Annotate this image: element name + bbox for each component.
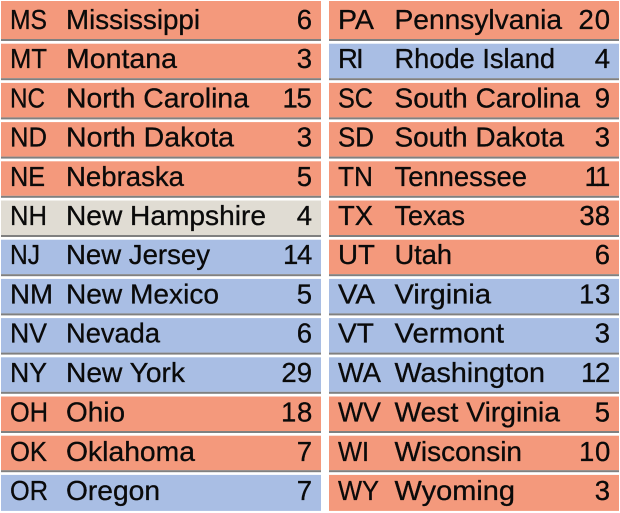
row: Washington: 12	[581, 357, 610, 388]
row: Nevada: 6	[297, 318, 312, 349]
row: North Carolina	[1, 82, 321, 119]
row: Vermont	[329, 318, 619, 355]
row: New Hampshire: 4	[297, 200, 312, 231]
row: Nevada: Nevada	[66, 318, 161, 349]
row: Rhode Island	[329, 43, 619, 80]
row: North Dakota: 3	[297, 122, 312, 153]
row: West Virginia: WV	[338, 396, 382, 427]
row: Vermont: VT	[338, 318, 374, 349]
row: Nebraska	[1, 161, 321, 198]
row: Vermont: 3	[595, 318, 610, 349]
row: New Mexico: 5	[297, 278, 312, 309]
row: Wyoming: Wyoming	[394, 475, 515, 506]
row: North Dakota: North Dakota	[66, 122, 235, 153]
row: Mississippi: 6	[297, 4, 312, 35]
row: Tennessee: TN	[338, 161, 373, 192]
row: South Dakota: South Dakota	[394, 122, 565, 153]
row: New Hampshire	[1, 200, 321, 237]
row: Washington: WA	[338, 357, 382, 388]
row: Virginia: VA	[338, 278, 376, 309]
row: Texas: 38	[579, 200, 610, 231]
row: New Jersey: New Jersey	[66, 239, 210, 270]
row: Wisconsin: WI	[338, 436, 369, 467]
row: Oklahoma	[1, 436, 321, 472]
row: Wyoming: WY	[338, 475, 379, 506]
row: Utah	[329, 239, 619, 276]
row: Oregon: Oregon	[66, 475, 160, 506]
row: Ohio: Ohio	[66, 396, 125, 427]
row: South Dakota: SD	[338, 122, 374, 153]
row: North Dakota: ND	[10, 122, 47, 153]
row: West Virginia: 5	[595, 396, 610, 427]
row: Montana: MT	[10, 43, 47, 74]
row: South Carolina: South Carolina	[394, 82, 581, 113]
row: Washington: Washington	[394, 357, 545, 388]
row: New Hampshire: New Hampshire	[66, 200, 266, 231]
row: South Dakota: 3	[595, 122, 610, 153]
row: New Mexico: New Mexico	[66, 278, 219, 309]
row: Rhode Island: 4	[595, 43, 610, 74]
row: North Carolina: NC	[10, 82, 45, 113]
row: Rhode Island: RI	[338, 43, 364, 74]
row: North Dakota	[1, 122, 321, 159]
row: Washington	[329, 357, 619, 394]
row: Texas: TX	[338, 200, 373, 231]
row: Nevada: NV	[10, 318, 48, 349]
row: Ohio	[1, 396, 321, 433]
row: South Carolina: SC	[338, 82, 373, 113]
row: Mississippi: MS	[10, 4, 47, 35]
row: Oregon: OR	[10, 475, 48, 506]
row: Pennsylvania: PA	[338, 4, 375, 35]
row: Tennessee	[329, 161, 619, 198]
row: Virginia: 13	[579, 278, 610, 309]
row: Tennessee: Tennessee	[394, 161, 527, 192]
row: Montana	[1, 43, 321, 80]
row: Oregon	[1, 475, 321, 511]
row: Montana: Montana	[66, 43, 178, 74]
row: Texas	[329, 200, 619, 237]
row: Wisconsin: Wisconsin	[394, 436, 522, 467]
panel: left column of states	[1, 1, 321, 511]
row: New Mexico	[1, 278, 321, 315]
row: Nebraska: Nebraska	[66, 161, 185, 192]
row: Nebraska: 5	[297, 161, 312, 192]
row: Virginia	[329, 278, 619, 315]
row: Wisconsin	[329, 436, 619, 472]
row: West Virginia: West Virginia	[394, 396, 561, 427]
row: New Hampshire: NH	[10, 200, 47, 231]
row: South Carolina	[329, 82, 619, 119]
row: Oregon: 7	[297, 475, 312, 506]
row: New Mexico: NM	[10, 278, 53, 309]
row: North Carolina: North Carolina	[66, 82, 250, 113]
row: Utah: 6	[595, 239, 610, 270]
row: Oklahoma: OK	[10, 436, 48, 467]
row: Wyoming	[329, 475, 619, 511]
row: New Jersey: 14	[283, 239, 312, 270]
row: South Dakota	[329, 122, 619, 159]
row: Mississippi	[1, 1, 321, 41]
row: Virginia: Virginia	[394, 278, 492, 309]
row: Ohio: 18	[281, 396, 312, 427]
row: Utah: Utah	[394, 239, 452, 270]
row: Texas: Texas	[394, 200, 465, 231]
row: Pennsylvania	[329, 1, 619, 41]
row: Wyoming: 3	[595, 475, 610, 506]
row: Utah: UT	[338, 239, 375, 270]
row: Pennsylvania: 20	[578, 4, 610, 35]
row: Nebraska: NE	[10, 161, 45, 192]
row: West Virginia	[329, 396, 619, 433]
row: Mississippi: Mississippi	[66, 4, 200, 35]
row: Vermont: Vermont	[394, 318, 504, 349]
row: New York: 29	[281, 357, 312, 388]
row: Wisconsin: 10	[579, 436, 610, 467]
row: New York	[1, 357, 321, 394]
row: New Jersey: NJ	[10, 239, 40, 270]
row: Rhode Island: Rhode Island	[394, 43, 555, 74]
row: Oklahoma: Oklahoma	[66, 436, 196, 467]
row: Ohio: OH	[10, 396, 48, 427]
panel: right column of states	[329, 1, 619, 511]
row: Tennessee: 11	[584, 161, 610, 192]
row: Oklahoma: 7	[297, 436, 312, 467]
row: Montana: 3	[297, 43, 312, 74]
row: New Jersey	[1, 239, 321, 276]
row: New York: NY	[10, 357, 47, 388]
row: New York: New York	[66, 357, 185, 388]
row: Pennsylvania: Pennsylvania	[394, 4, 563, 35]
row: South Carolina: 9	[595, 82, 610, 113]
row: Nevada	[1, 318, 321, 355]
row: North Carolina: 15	[282, 82, 312, 113]
